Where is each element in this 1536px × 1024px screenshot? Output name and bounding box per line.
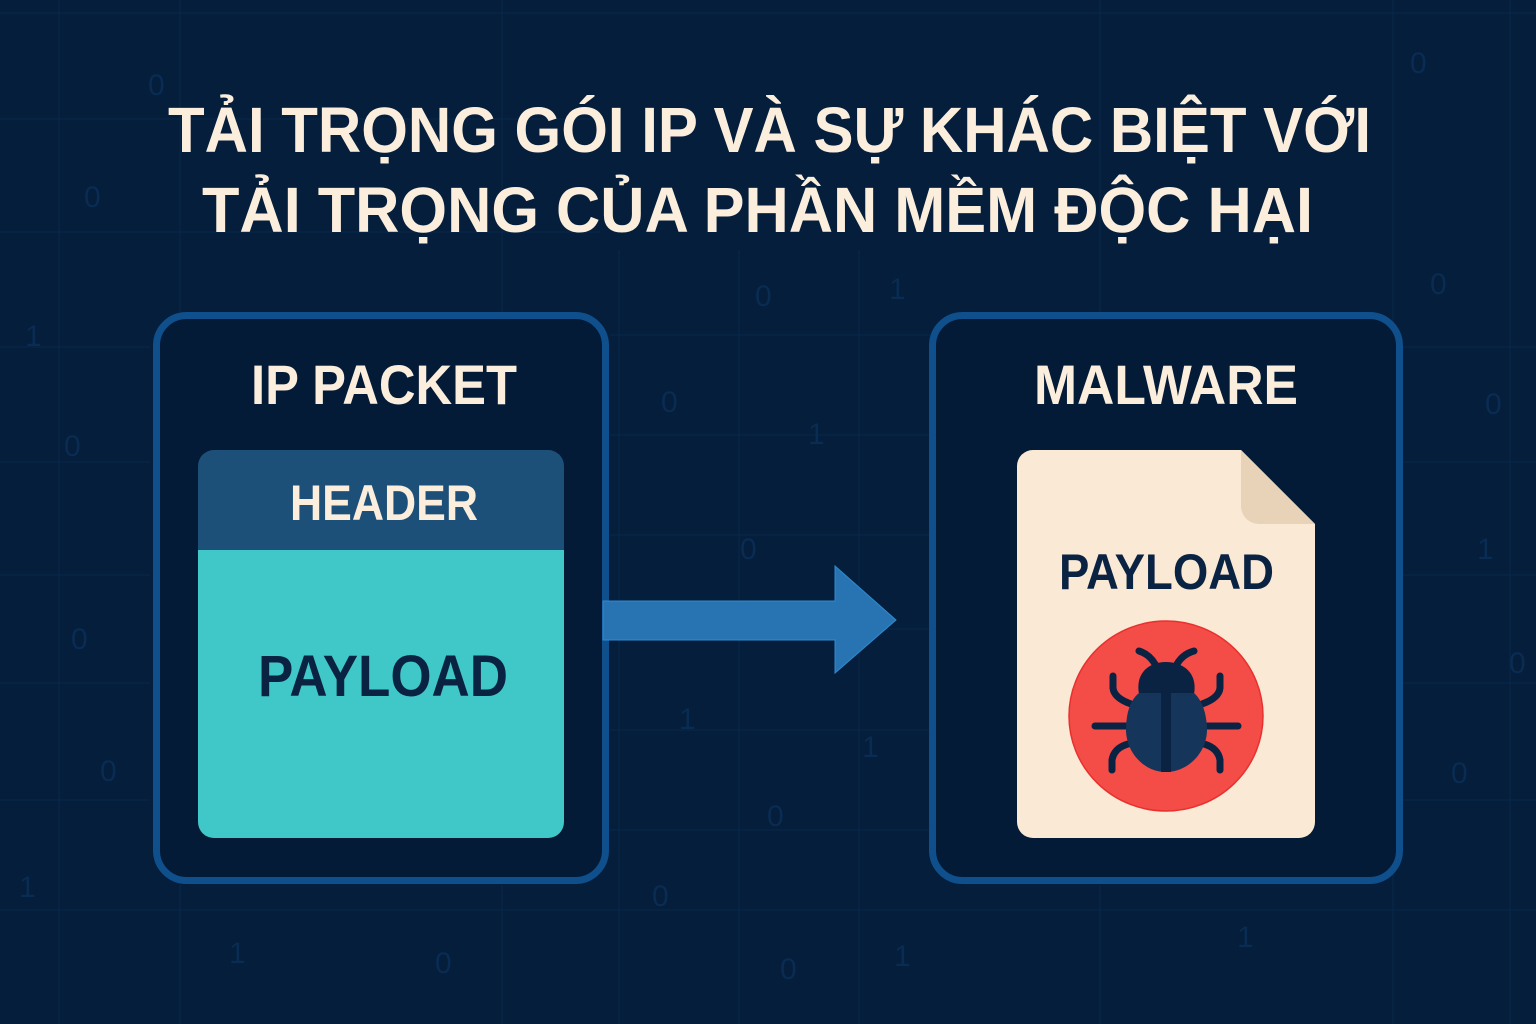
background binary digits: 0 xyxy=(71,623,88,656)
panel: malware xyxy=(932,316,1400,880)
payload block xyxy=(198,550,564,838)
title xyxy=(168,93,1371,246)
background binary digits: 0 xyxy=(435,947,452,980)
icon: malware file: PAYLOAD xyxy=(1059,544,1274,600)
background binary digits: 1 xyxy=(229,937,246,970)
background binary digits: 0 xyxy=(100,755,117,788)
background binary digits: 0 xyxy=(148,69,165,102)
heading: malware: MALWARE xyxy=(1034,353,1298,416)
background binary digits: 1 xyxy=(679,703,696,736)
background binary digits: 0 xyxy=(661,386,678,419)
background binary digits: 0 xyxy=(755,280,772,313)
background binary digits: 0 xyxy=(1451,757,1468,790)
header block xyxy=(198,450,564,550)
background binary digits: 0 xyxy=(1485,388,1502,421)
background binary digits: 1 xyxy=(1477,533,1494,566)
title: TẢI TRỌNG CỦA PHẦN MỀM ĐỘC HẠI xyxy=(202,173,1313,246)
background binary digits: 1 xyxy=(1237,921,1254,954)
background binary digits: 1 xyxy=(19,871,36,904)
icon: malware file xyxy=(1017,450,1315,838)
panel: IP packet xyxy=(156,316,606,880)
heading: IP packet: IP PACKET xyxy=(251,353,517,416)
background binary digits: 0 xyxy=(780,953,797,986)
title: TẢI TRỌNG GÓI IP VÀ SỰ KHÁC BIỆT VỚI xyxy=(168,93,1371,166)
background binary digits: 0 xyxy=(767,800,784,833)
background binary digits: 1 xyxy=(25,320,42,353)
background binary digits: 1 xyxy=(862,731,879,764)
background binary digits: 1 xyxy=(808,418,825,451)
background binary digits: 0 xyxy=(1430,268,1447,301)
header block: HEADER xyxy=(290,475,478,531)
background binary digits: 0 xyxy=(64,430,81,463)
background binary digits: 0 xyxy=(1410,47,1427,80)
arrow xyxy=(603,566,896,673)
background binary digits: 0 xyxy=(652,880,669,913)
background binary digits: 1 xyxy=(894,940,911,973)
background binary digits: 1 xyxy=(889,273,906,306)
payload block: PAYLOAD xyxy=(258,644,508,709)
background binary digits: 0 xyxy=(1509,647,1526,680)
icon: bug in red circle xyxy=(1069,621,1263,811)
background binary digits: 0 xyxy=(740,533,757,566)
background binary digits: 0 xyxy=(84,181,101,214)
